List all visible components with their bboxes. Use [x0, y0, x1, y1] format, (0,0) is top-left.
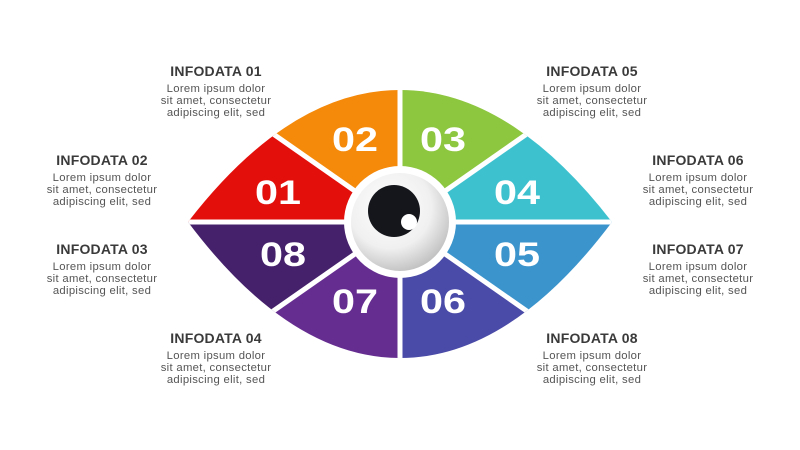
text: infodata 02: adipiscing elit, sed	[53, 196, 151, 208]
segment 05	[447, 222, 612, 311]
text: infodata 01: INFODATA 01	[170, 63, 262, 79]
text: infodata 06: Lorem ipsum dolor	[649, 172, 747, 184]
eyeball	[344, 166, 456, 278]
segment 03	[402, 90, 526, 188]
segment 06	[402, 256, 527, 358]
text: infodata 03: INFODATA 03	[56, 241, 148, 257]
text: infodata 07: sit amet, consectetur	[643, 273, 753, 285]
text: infodata 04	[161, 330, 271, 386]
segment 02	[274, 90, 400, 188]
text: infodata 08	[537, 330, 647, 386]
text: infodata 01: Lorem ipsum dolor	[167, 83, 265, 95]
text: infodata 05: INFODATA 05	[546, 63, 638, 79]
text: infodata 01: adipiscing elit, sed	[167, 107, 265, 119]
text: infodata 04: Lorem ipsum dolor	[167, 350, 265, 362]
segment 08	[188, 222, 353, 311]
segment numbers: 05	[494, 236, 540, 274]
segment 07	[273, 256, 399, 358]
segment numbers: 01	[255, 174, 301, 212]
text: infodata 04: adipiscing elit, sed	[167, 374, 265, 386]
text: infodata 02: Lorem ipsum dolor	[53, 172, 151, 184]
text: infodata 03: sit amet, consectetur	[47, 273, 157, 285]
segment numbers: 08	[260, 236, 306, 274]
segment numbers: 03	[420, 121, 466, 159]
text: infodata 08: INFODATA 08	[546, 330, 638, 346]
segment numbers: 06	[420, 283, 466, 321]
text: infodata 08: adipiscing elit, sed	[543, 374, 641, 386]
text: infodata 02: sit amet, consectetur	[47, 184, 157, 196]
text: infodata 05: adipiscing elit, sed	[543, 107, 641, 119]
text: infodata 06: adipiscing elit, sed	[649, 196, 747, 208]
text: infodata 04: sit amet, consectetur	[161, 362, 271, 374]
eye diagram	[188, 90, 612, 358]
text: infodata 02	[47, 152, 157, 208]
text: infodata 05: sit amet, consectetur	[537, 95, 647, 107]
segment numbers: 02	[332, 121, 378, 159]
text: infodata 03	[47, 241, 157, 297]
segment 04	[448, 134, 612, 222]
text: infodata 05: Lorem ipsum dolor	[543, 83, 641, 95]
segment numbers: 04	[494, 174, 540, 212]
text: infodata 06: sit amet, consectetur	[643, 184, 753, 196]
segment 01	[188, 134, 352, 222]
text: infodata 07: adipiscing elit, sed	[649, 285, 747, 297]
text: infodata 05	[537, 63, 647, 119]
text: infodata 07	[643, 241, 753, 297]
segment numbers: 07	[332, 283, 378, 321]
text: infodata 07: INFODATA 07	[652, 241, 744, 257]
text: infodata 04: INFODATA 04	[170, 330, 262, 346]
text: infodata 01	[161, 63, 271, 119]
text: infodata 07: Lorem ipsum dolor	[649, 261, 747, 273]
text: infodata 01: sit amet, consectetur	[161, 95, 271, 107]
text: infodata 06: INFODATA 06	[652, 152, 744, 168]
segment numbers	[255, 121, 540, 321]
text: infodata 03: adipiscing elit, sed	[53, 285, 151, 297]
text: infodata 03: Lorem ipsum dolor	[53, 261, 151, 273]
text: infodata 08: sit amet, consectetur	[537, 362, 647, 374]
text: infodata 08: Lorem ipsum dolor	[543, 350, 641, 362]
text: infodata 06	[643, 152, 753, 208]
text: infodata 02: INFODATA 02	[56, 152, 148, 168]
